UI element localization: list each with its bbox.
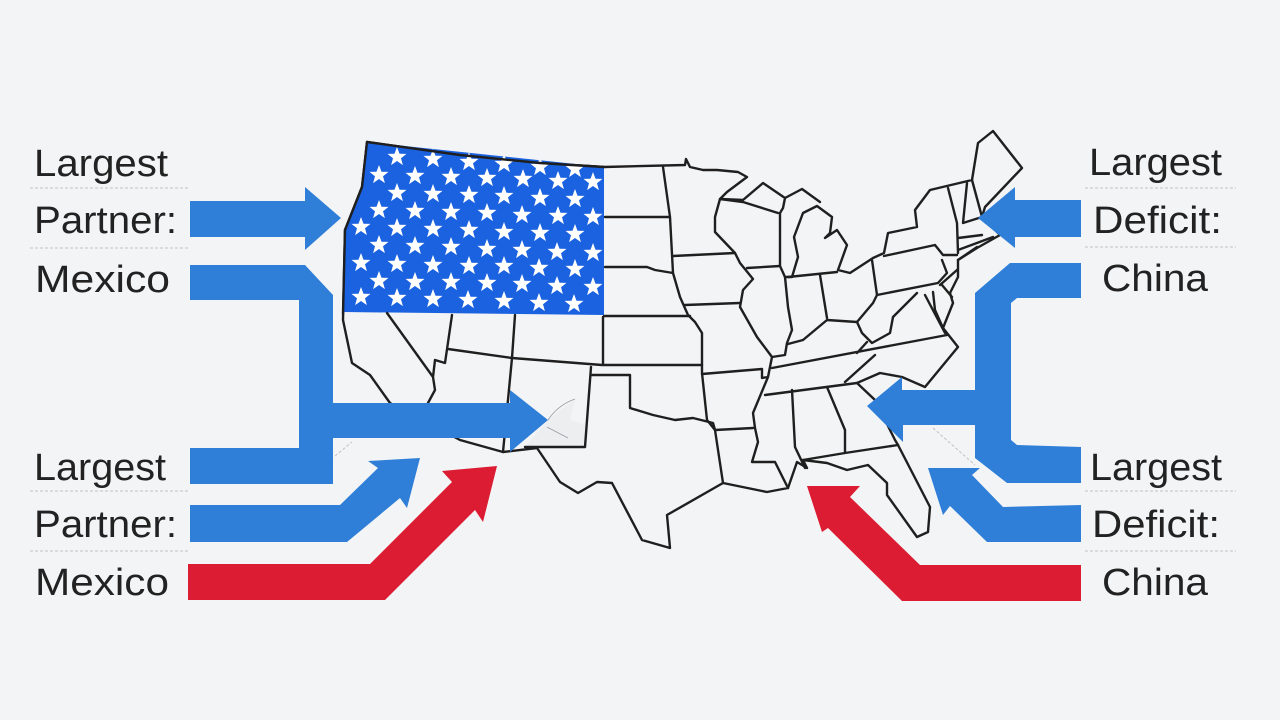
label: bottom right deficit: China xyxy=(1102,562,1209,604)
label: top right deficit: Deficit: xyxy=(1093,200,1222,242)
guide lines xyxy=(30,188,1236,551)
label: top right deficit xyxy=(1089,142,1222,300)
upper peninsula shoreline xyxy=(785,189,820,202)
state borders west xyxy=(387,313,723,483)
arrow: middle left blue elbow xyxy=(190,265,548,484)
label: bottom right deficit: Largest xyxy=(1090,447,1222,489)
state borders east xyxy=(765,245,957,468)
state borders midwest xyxy=(702,199,877,488)
label: top right deficit: Largest xyxy=(1089,142,1222,184)
state borders northeast xyxy=(933,180,993,328)
label: bottom left partner: Partner: xyxy=(34,504,177,546)
label: top left partner: Partner: xyxy=(34,200,177,242)
label: bottom right deficit xyxy=(1090,447,1222,604)
infographic canvas xyxy=(30,130,1236,601)
arrow: lower right blue xyxy=(928,468,1081,542)
label: top right deficit: China xyxy=(1102,258,1209,300)
shaded patch in New Mexico xyxy=(525,399,585,447)
label: bottom left partner: Mexico xyxy=(35,562,169,604)
thin sketch marks in New Mexico xyxy=(547,399,575,438)
arrow: lower left blue xyxy=(190,458,420,542)
stars flag panel xyxy=(340,138,604,315)
label: bottom left partner: Largest xyxy=(34,447,166,489)
label: top left partner: Mexico xyxy=(35,259,170,301)
arrow: lower right red xyxy=(807,486,1081,601)
arrow: middle right blue elbow xyxy=(867,263,1081,483)
label: top left partner: Largest xyxy=(34,143,168,185)
map outline xyxy=(343,131,1022,548)
label: bottom left partner xyxy=(34,447,177,604)
label: bottom right deficit: Deficit: xyxy=(1092,504,1220,546)
flag border xyxy=(343,142,604,314)
map of the United States xyxy=(340,131,1022,548)
state borders plains xyxy=(605,167,740,430)
arrow: lower left red xyxy=(188,466,497,600)
arrow: top right blue xyxy=(978,187,1081,248)
arrow: top left blue xyxy=(190,187,341,250)
label: top left partner xyxy=(34,143,177,301)
